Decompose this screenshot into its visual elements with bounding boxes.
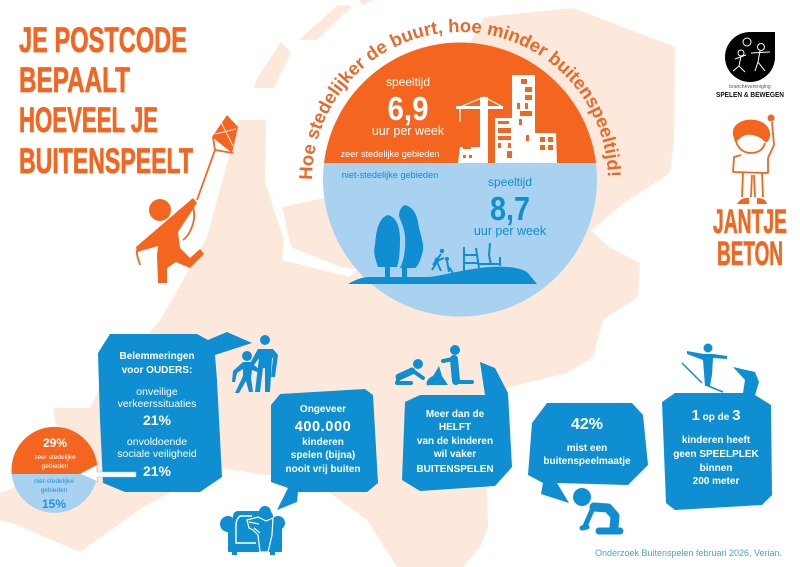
speech bubble: helft wil vaker buitenspelen: van de kinderen: [417, 436, 493, 447]
speech bubble: belemmeringen voor ouders: Belemmeringen: [119, 351, 195, 362]
small pie: 29% vs 15%: zeer stedelijke: [34, 454, 76, 461]
speech bubble: belemmeringen voor ouders: verkeerssituaties: [118, 398, 196, 410]
title: BUITENSPEELT: [19, 142, 193, 181]
city stat: zeer stedelijke gebieden: [340, 149, 440, 159]
icon: child balancing on rope: [682, 344, 727, 392]
title: [19, 21, 193, 181]
non-urban stat: 8,7: [490, 190, 530, 227]
small pie: 29% vs 15%: 29%: [43, 436, 67, 450]
icon: crawling child: [573, 488, 620, 531]
speech bubble: 42% mist buitenspeelmaatje: 42%: [571, 416, 603, 433]
icon: trees, hill and playing children: [348, 205, 537, 284]
small pie: 29% vs 15%: niet-stedelijke: [34, 478, 74, 485]
title: HOEVEEL JE: [19, 101, 158, 140]
speech bubble: 1 op de 3: kinderen heeft: [682, 435, 751, 446]
Jantje Beton wordmark: [713, 203, 787, 273]
speech bubble: belemmeringen voor ouders: voor OUDERS:: [122, 365, 192, 376]
city stat: speeltijd: [386, 75, 430, 89]
speech bubble: helft wil vaker buitenspelen: [402, 362, 512, 491]
icon: child on sofa: [220, 506, 285, 555]
speech bubble: 1 op de 3: binnen: [700, 463, 732, 474]
non-urban stat: [342, 170, 547, 238]
icon: Jantje Beton boy: [733, 114, 774, 204]
speech bubble: 400.000 kinderen: nooit vrij buiten: [286, 464, 360, 475]
city stat: [340, 75, 445, 159]
speech bubble: 1 op de 3: 1 op de 3: [692, 407, 740, 424]
icon: child with kite: [136, 115, 238, 283]
speech bubble: 42% mist buitenspeelmaatje: [528, 403, 648, 503]
speech bubble: belemmeringen voor ouders: onveilige: [136, 386, 178, 398]
non-urban stat: niet-stedelijke gebieden: [342, 170, 438, 180]
speech bubble: belemmeringen voor ouders: [98, 332, 252, 492]
main circle: speeltijd: [299, 18, 622, 316]
speech bubble: 1 op de 3: [662, 367, 772, 510]
speech bubble: 400.000 kinderen: 400.000: [295, 419, 351, 435]
speech bubble: belemmeringen voor ouders: sociale veiligheid: [117, 448, 197, 460]
speech bubble: 42% mist buitenspeelmaatje: mist een: [567, 443, 607, 454]
icon: parent and child: [232, 335, 278, 393]
speech bubble: 400.000 kinderen: Ongeveer: [300, 404, 346, 415]
arrow from bubble to pie: [80, 465, 136, 482]
speech bubble: 42% mist buitenspeelmaatje: buitenspeelmaatje: [543, 456, 631, 467]
non-urban stat: uur per week: [474, 224, 547, 238]
logo: Spelen & Bewegen: [716, 32, 784, 99]
city stat: 6,9: [388, 90, 428, 127]
icon: city with crane: [456, 75, 557, 163]
circular heading: Hoe stedelijker de buurt, hoe minder buitenspeeltijd!: [299, 18, 622, 179]
small pie: 29% vs 15%: [11, 427, 97, 513]
logo: Spelen & Bewegen: brancheverenigíng: [729, 84, 771, 90]
speech bubble: helft wil vaker buitenspelen: wil vaker: [433, 449, 476, 460]
title: JE POSTCODE: [19, 21, 187, 60]
speech bubble: helft wil vaker buitenspelen: HELFT: [439, 422, 471, 433]
small pie: 29% vs 15%: gebieden: [42, 463, 69, 470]
small pie: 29% vs 15%: gebieden: [41, 487, 68, 494]
speech bubble: helft wil vaker buitenspelen: Meer dan de: [426, 409, 485, 420]
speech bubble: belemmeringen voor ouders: onvoldoende: [127, 436, 187, 448]
logo: Spelen & Bewegen: SPELEN & BEWEGEN: [716, 92, 784, 99]
speech bubble: 400.000 kinderen: kinderen: [302, 437, 344, 448]
speech bubble: helft wil vaker buitenspelen: BUITENSPELEN: [416, 464, 494, 475]
speech bubble: 1 op de 3: 200 meter: [693, 476, 739, 487]
speech bubble: 400.000 kinderen: spelen (bijna): [291, 450, 355, 461]
speech bubble: belemmeringen voor ouders: 21%: [143, 412, 172, 428]
city stat: uur per week: [372, 124, 445, 138]
source note: Onderzoek Buitenspelen februari 2026, Verian.: [595, 548, 782, 558]
speech bubble: belemmeringen voor ouders: 21%: [143, 463, 172, 479]
speech bubble: 400.000 kinderen: [271, 389, 378, 510]
icon: children in sandbox: [397, 345, 472, 385]
small pie: 29% vs 15%: 15%: [42, 497, 66, 511]
title: BEPAALT: [19, 61, 130, 100]
non-urban stat: speeltijd: [488, 175, 532, 189]
speech bubble: 1 op de 3: geen SPEELPLEK: [673, 449, 760, 460]
